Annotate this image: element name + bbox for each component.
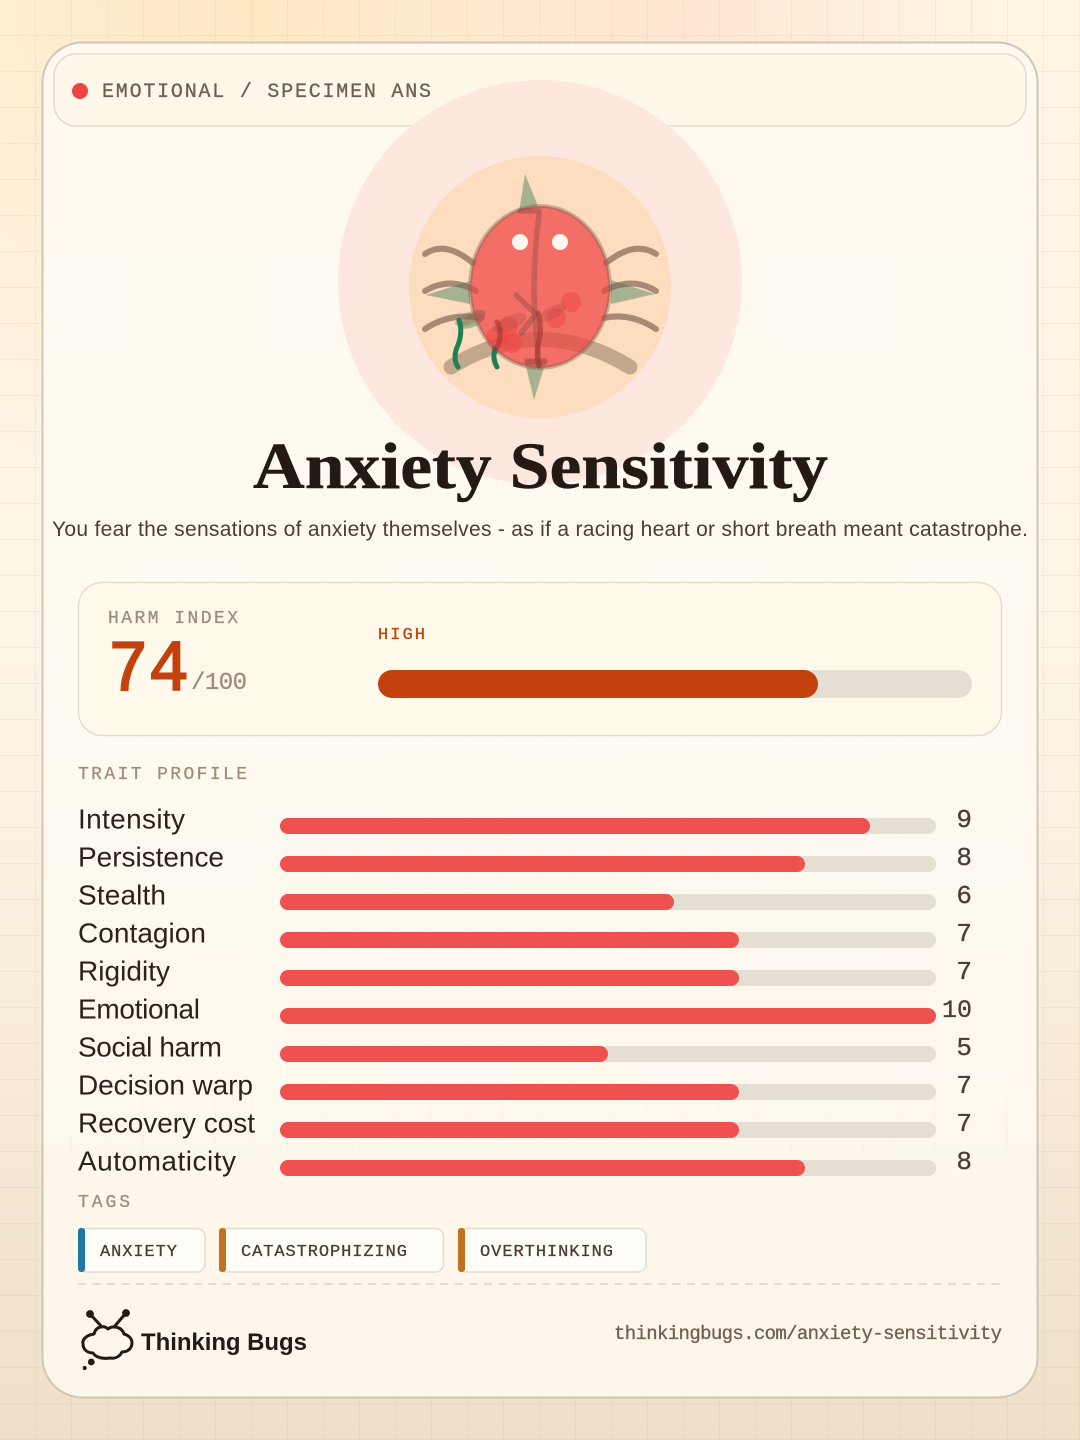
green tendrils bbox=[455, 320, 497, 367]
harm bar bbox=[378, 670, 972, 698]
header strip bbox=[54, 54, 1026, 126]
trait: persistence bbox=[78, 842, 972, 873]
trait: stealth bbox=[78, 880, 972, 911]
trait: automaticity: Automaticity bbox=[78, 1146, 236, 1176]
harm index label: HARM INDEX bbox=[108, 609, 238, 629]
wordmark: Thinking Bugs bbox=[141, 1329, 307, 1356]
trait: persistence: 8 bbox=[956, 843, 972, 873]
trait: automaticity: 8 bbox=[956, 1147, 972, 1177]
body bbox=[470, 206, 610, 368]
trait: stealth: Stealth bbox=[78, 880, 166, 910]
trait: automaticity bbox=[78, 1146, 972, 1177]
trait: recovery cost: Recovery cost bbox=[78, 1108, 255, 1138]
trait: intensity bbox=[78, 804, 972, 835]
title: Anxiety Sensitivity bbox=[253, 430, 828, 503]
tag: catastrophizing bbox=[219, 1228, 444, 1272]
tag: overthinking bbox=[458, 1228, 646, 1272]
trait: intensity: Intensity bbox=[78, 804, 185, 834]
trait profile heading: TRAIT PROFILE bbox=[78, 765, 247, 785]
severity label: HIGH bbox=[378, 626, 425, 645]
score denominator: /100 bbox=[191, 670, 247, 697]
dark red tendrils bbox=[494, 313, 540, 366]
spikes bbox=[426, 174, 655, 400]
inner halo bbox=[409, 156, 671, 418]
tag: anxiety: ANXIETY bbox=[100, 1243, 177, 1262]
trait: emotional: Emotional bbox=[78, 994, 200, 1024]
trait: recovery cost: 7 bbox=[956, 1109, 972, 1139]
tag: catastrophizing: CATASTROPHIZING bbox=[241, 1243, 407, 1262]
eyes bbox=[512, 234, 528, 250]
trait: rigidity: 7 bbox=[956, 957, 972, 987]
category label: EMOTIONAL / SPECIMEN ANS bbox=[102, 81, 431, 104]
trait: persistence: Persistence bbox=[78, 842, 224, 872]
harm score: 74 bbox=[108, 630, 189, 712]
outer halo bbox=[338, 80, 742, 484]
logo: thinking bugs bbox=[83, 1311, 307, 1370]
ground arc bbox=[451, 340, 630, 367]
trait: intensity: 9 bbox=[956, 805, 972, 835]
dark veins bbox=[516, 211, 545, 365]
trait: emotional bbox=[78, 994, 972, 1025]
legs bbox=[425, 249, 656, 329]
chart: trait profile bbox=[78, 804, 972, 1177]
trait: social harm bbox=[78, 1032, 972, 1063]
trait: decision warp bbox=[78, 1070, 972, 1101]
panel: harm index bbox=[78, 582, 1002, 736]
trait: rigidity bbox=[78, 956, 972, 987]
trait: rigidity: Rigidity bbox=[78, 956, 170, 986]
trait: stealth: 6 bbox=[956, 881, 972, 911]
trait: contagion bbox=[78, 918, 972, 949]
illustration: anxiety bug bbox=[338, 80, 742, 484]
trait: contagion: 7 bbox=[956, 919, 972, 949]
trait: recovery cost bbox=[78, 1108, 972, 1139]
source url: thinkingbugs.com/anxiety-sensitivity bbox=[614, 1323, 1002, 1345]
trait: emotional: 10 bbox=[942, 996, 972, 1025]
tags heading: TAGS bbox=[78, 1193, 130, 1213]
red blotches bbox=[453, 292, 581, 353]
trait: decision warp: Decision warp bbox=[78, 1070, 253, 1100]
tag: overthinking: OVERTHINKING bbox=[480, 1243, 613, 1262]
trait: contagion: Contagion bbox=[78, 918, 206, 948]
tag: anxiety bbox=[78, 1228, 205, 1272]
trait: social harm: 5 bbox=[956, 1033, 972, 1063]
icon: red status dot bbox=[72, 83, 88, 99]
subtitle: You fear the sensations of anxiety themselves - as if a racing heart or short breath meant catastrophe. bbox=[52, 518, 1028, 541]
icon: cloud bug bbox=[83, 1311, 132, 1358]
trait: decision warp: 7 bbox=[956, 1071, 972, 1101]
trait: social harm: Social harm bbox=[78, 1032, 222, 1062]
